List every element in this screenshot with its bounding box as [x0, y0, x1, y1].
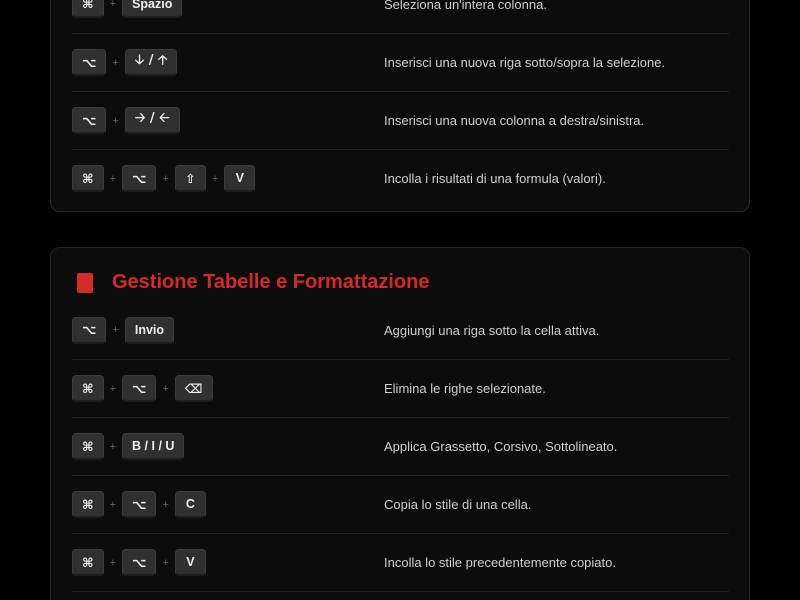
row: paste style: Incolla lo stile precedentemente copiato. [384, 555, 616, 570]
row: delete rows: ⌫ [185, 382, 203, 396]
row: copy style [72, 475, 729, 533]
row: insert row: Inserisci una nuova riga sotto/sopra la selezione. [384, 55, 665, 70]
row: bold italic underline [72, 417, 729, 475]
row: bold italic underline: B / I / U [132, 439, 174, 453]
row: add row: + [112, 324, 119, 336]
row: copy style: + [162, 498, 169, 510]
row: paste values: + [162, 172, 169, 184]
row: add row: Invio [135, 322, 164, 336]
row: delete rows: ⌥ [132, 382, 146, 396]
row: paste values [72, 149, 729, 207]
row: delete rows: + [162, 382, 169, 394]
row: paste style: ⌘ [82, 556, 94, 570]
heading: Gestione Tabelle e Formattazione [112, 271, 429, 293]
row: paste values: + [212, 172, 218, 184]
row: delete rows: Elimina le righe selezionate. [384, 381, 546, 396]
row: insert column: 🡢 / 🡠 [135, 111, 170, 126]
panel: table shortcuts (continued) [50, 0, 750, 212]
row: paste style: V [186, 555, 195, 569]
row: paste values: Incolla i risultati di una formula (valori). [384, 171, 606, 186]
row: insert row: + [112, 56, 119, 68]
row: copy style: Copia lo stile di una cella. [384, 497, 531, 512]
row: add row: Aggiungi una riga sotto la cella attiva. [384, 322, 599, 338]
row: paste values: V [236, 171, 244, 185]
row: paste style [72, 533, 729, 591]
row: add row: ⌥ [82, 323, 96, 337]
row: bold italic underline: Applica Grassetto, Corsivo, Sottolineato. [384, 439, 617, 454]
row: insert column: ⌥ [82, 114, 96, 128]
row: paste style: + [162, 556, 169, 568]
row: insert row: 🡣 / 🡡 [135, 53, 167, 68]
row: insert row [72, 33, 729, 91]
row: select column [72, 0, 547, 18]
row: paste values: + [110, 172, 116, 184]
row: copy style: C [186, 497, 195, 511]
row: paste values: ⌥ [132, 172, 146, 186]
row: copy style: + [110, 498, 116, 510]
row: paste values: ⇧ [185, 172, 196, 186]
row: copy style: ⌘ [82, 498, 94, 512]
row: delete rows: + [110, 382, 116, 394]
row: paste style: ⌥ [132, 556, 146, 570]
row: insert row: ⌥ [82, 56, 96, 70]
row: insert column: + [112, 114, 119, 126]
row: paste values: ⌘ [82, 172, 94, 186]
row: next (cut off) [72, 591, 729, 600]
panel: Gestione Tabelle e Formattazione [50, 247, 750, 600]
row: delete rows [72, 359, 729, 417]
row: bold italic underline: + [110, 440, 116, 452]
row: insert column [72, 91, 729, 149]
row: copy style: ⌥ [132, 498, 146, 512]
row: bold italic underline: ⌘ [82, 440, 94, 454]
row: insert column: Inserisci una nuova colonna a destra/sinistra. [384, 113, 644, 128]
row: paste style: + [110, 556, 116, 568]
row: delete rows: ⌘ [82, 382, 94, 396]
row: add row [72, 317, 599, 344]
